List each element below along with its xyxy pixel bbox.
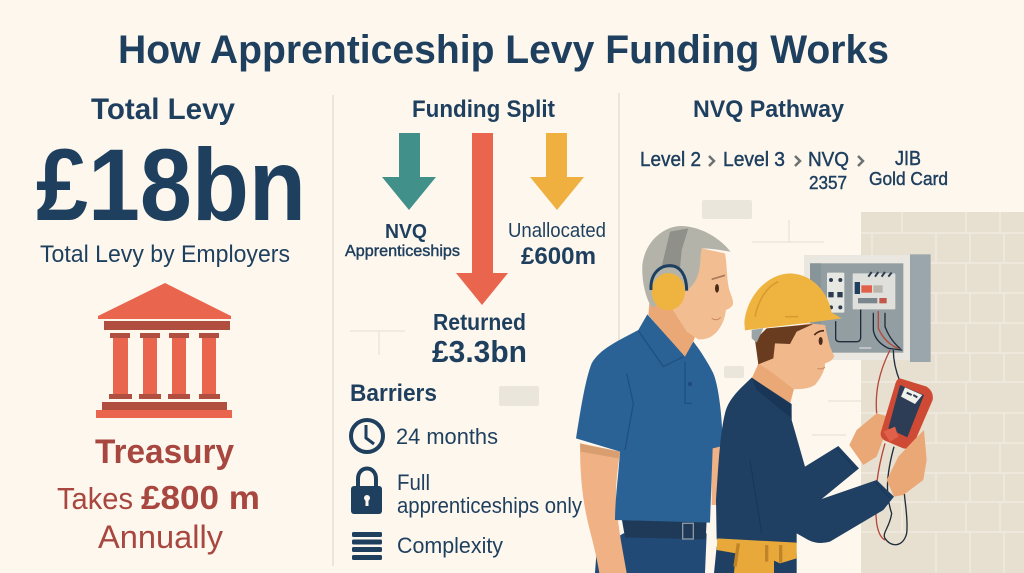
step: jib gold card: [869, 148, 948, 189]
icon: treasury building: [96, 283, 232, 418]
neck: [752, 357, 795, 404]
heading: total levy: Total Levy: [91, 93, 235, 126]
text: full apprenticeships only: [397, 470, 582, 518]
step: jib gold card: JIB: [895, 148, 921, 170]
illustration: brick wall: [861, 212, 1024, 573]
near hand: [849, 413, 888, 465]
label: unallocated 600m: [508, 220, 606, 270]
face: [667, 248, 733, 339]
heading: nvq pathway: NVQ Pathway: [693, 96, 845, 123]
ear muff: [652, 273, 685, 310]
label: returned 3.3bn: £3.3bn: [432, 334, 527, 369]
illustration: young apprentice: [714, 273, 933, 573]
step: nvq 2357: 2357: [809, 173, 847, 193]
arrow: teal: [382, 133, 436, 210]
arrow: chevron 3: [858, 156, 863, 166]
label: returned 3.3bn: [432, 309, 527, 369]
label: returned 3.3bn: Returned: [433, 309, 526, 335]
shirt: [576, 314, 723, 523]
big number: 18bn: £18bn: [36, 128, 306, 242]
hard hat: [744, 273, 842, 330]
hair: [755, 324, 813, 364]
multimeter: [881, 378, 933, 449]
step: jib gold card: Gold Card: [869, 169, 948, 189]
eye and mouth: [819, 337, 823, 345]
trousers: [595, 533, 707, 573]
label: nvq apprenticeships: [345, 221, 460, 260]
face: [758, 323, 834, 389]
trousers: [714, 547, 797, 573]
arrow: red: [456, 133, 508, 305]
panel: total levy: [36, 93, 306, 555]
illustration: multimeter wires: [876, 350, 907, 545]
step: nvq 2357: [808, 149, 849, 193]
illustration: older supervisor: [576, 226, 733, 573]
panel: barriers: [350, 380, 582, 560]
label: takes 800m: Takes: [57, 481, 133, 516]
right arm: [712, 445, 720, 505]
hair: [642, 226, 731, 307]
belt: [717, 538, 797, 573]
title: How Apprenticeship Levy Funding Works: [118, 28, 889, 72]
arrow: chevron 2: [795, 156, 800, 166]
step: nvq 2357: NVQ: [808, 149, 849, 171]
left arm: [580, 443, 627, 573]
label: nvq apprenticeships: Apprenticeships: [345, 243, 460, 260]
icon: stacked lines: [352, 532, 382, 560]
illustration: electrical panel: [804, 254, 931, 362]
heading: funding split: Funding Split: [412, 96, 555, 123]
label: nvq apprenticeships: NVQ: [385, 221, 427, 243]
arrow: chevron 1: [709, 156, 714, 166]
text: full apprenticeships only: apprenticeships only: [397, 493, 582, 518]
icon: padlock: [351, 468, 382, 514]
neck: [648, 293, 698, 358]
heading: barriers: Barriers: [350, 380, 437, 407]
step: level 3: Level 3: [723, 149, 785, 171]
belt: [622, 518, 707, 539]
label: takes 800m: £800 m: [141, 479, 260, 516]
label: unallocated 600m: £600m: [521, 243, 596, 270]
eye and mouth: [715, 284, 719, 293]
shirt: [716, 378, 894, 543]
text: complexity: Complexity: [397, 533, 503, 558]
text: full apprenticeships only: Full: [397, 470, 430, 495]
label: annually: Annually: [98, 519, 223, 555]
label: treasury: Treasury: [95, 433, 234, 471]
arrow: yellow: [530, 133, 584, 210]
panel: funding split: [345, 96, 606, 369]
far hand: [887, 430, 927, 497]
step: level 2: Level 2: [640, 149, 701, 171]
label: unallocated 600m: Unallocated: [508, 220, 606, 242]
panel: nvq pathway: [640, 96, 948, 193]
label: takes 800m: [57, 479, 260, 516]
text: 24 months: 24 months: [396, 424, 498, 449]
icon: clock: [351, 420, 383, 452]
caption: total levy by employers: Total Levy by Employers: [40, 241, 290, 268]
